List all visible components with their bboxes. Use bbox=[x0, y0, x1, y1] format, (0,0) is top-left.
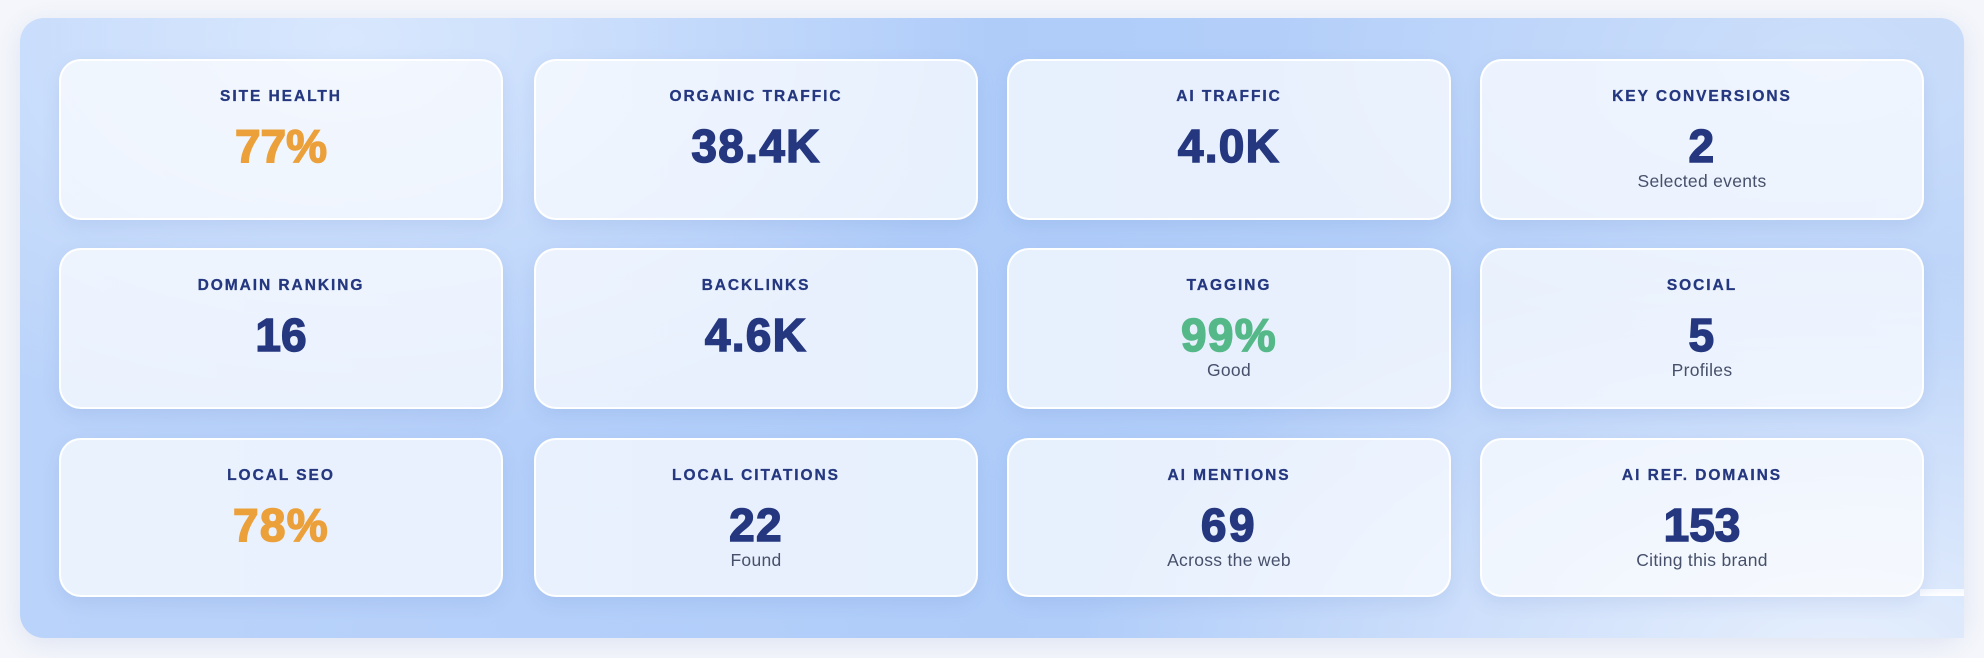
card: domain ranking bbox=[59, 248, 503, 409]
card: social bbox=[1480, 248, 1924, 409]
card: backlinks bbox=[534, 248, 978, 409]
card: AI referring domains: AI REF. DOMAINS bbox=[1622, 467, 1782, 484]
card: local citations: Found bbox=[730, 550, 782, 570]
card: social: 5 bbox=[1689, 308, 1715, 360]
card: AI traffic: AI TRAFFIC bbox=[1176, 88, 1282, 105]
card: AI mentions bbox=[1007, 438, 1451, 597]
card: AI referring domains bbox=[1480, 438, 1924, 597]
card: local citations bbox=[534, 438, 978, 597]
card: social: Profiles bbox=[1672, 360, 1732, 380]
card: key conversions: Selected events bbox=[1637, 171, 1767, 191]
card: site health: 77% bbox=[235, 120, 327, 172]
card: key conversions bbox=[1480, 59, 1924, 220]
card: AI referring domains: Citing this brand bbox=[1636, 550, 1768, 570]
card: tagging bbox=[1007, 248, 1451, 409]
card: local citations: LOCAL CITATIONS bbox=[672, 467, 840, 484]
card: organic traffic: ORGANIC TRAFFIC bbox=[669, 88, 843, 105]
card: tagging: Good bbox=[1207, 360, 1251, 380]
card: site health: SITE HEALTH bbox=[220, 88, 342, 105]
card: local SEO: LOCAL SEO bbox=[227, 467, 335, 484]
card: key conversions: 2 bbox=[1689, 120, 1715, 172]
card: site health bbox=[59, 59, 503, 220]
card: key conversions: KEY CONVERSIONS bbox=[1612, 88, 1792, 105]
card: organic traffic bbox=[534, 59, 978, 220]
white strip at bottom right bbox=[1920, 589, 1964, 596]
card: backlinks: 4.6K bbox=[705, 308, 807, 360]
card: tagging: 99% bbox=[1181, 308, 1277, 360]
card: AI mentions: 69 bbox=[1201, 498, 1257, 550]
card: AI traffic bbox=[1007, 59, 1451, 220]
card: AI mentions: AI MENTIONS bbox=[1167, 467, 1291, 484]
card: domain ranking: 16 bbox=[255, 308, 307, 360]
card: backlinks: BACKLINKS bbox=[702, 277, 810, 294]
card: AI mentions: Across the web bbox=[1167, 550, 1291, 570]
card: AI traffic: 4.0K bbox=[1178, 120, 1280, 172]
card: organic traffic: 38.4K bbox=[691, 120, 821, 172]
card: AI referring domains: 153 bbox=[1664, 498, 1740, 550]
card: social: SOCIAL bbox=[1667, 277, 1737, 294]
card: domain ranking: DOMAIN RANKING bbox=[198, 277, 364, 294]
card: local SEO: 78% bbox=[233, 498, 329, 550]
card: tagging: TAGGING bbox=[1187, 277, 1271, 294]
card: local citations: 22 bbox=[729, 498, 783, 550]
card: local SEO bbox=[59, 438, 503, 597]
